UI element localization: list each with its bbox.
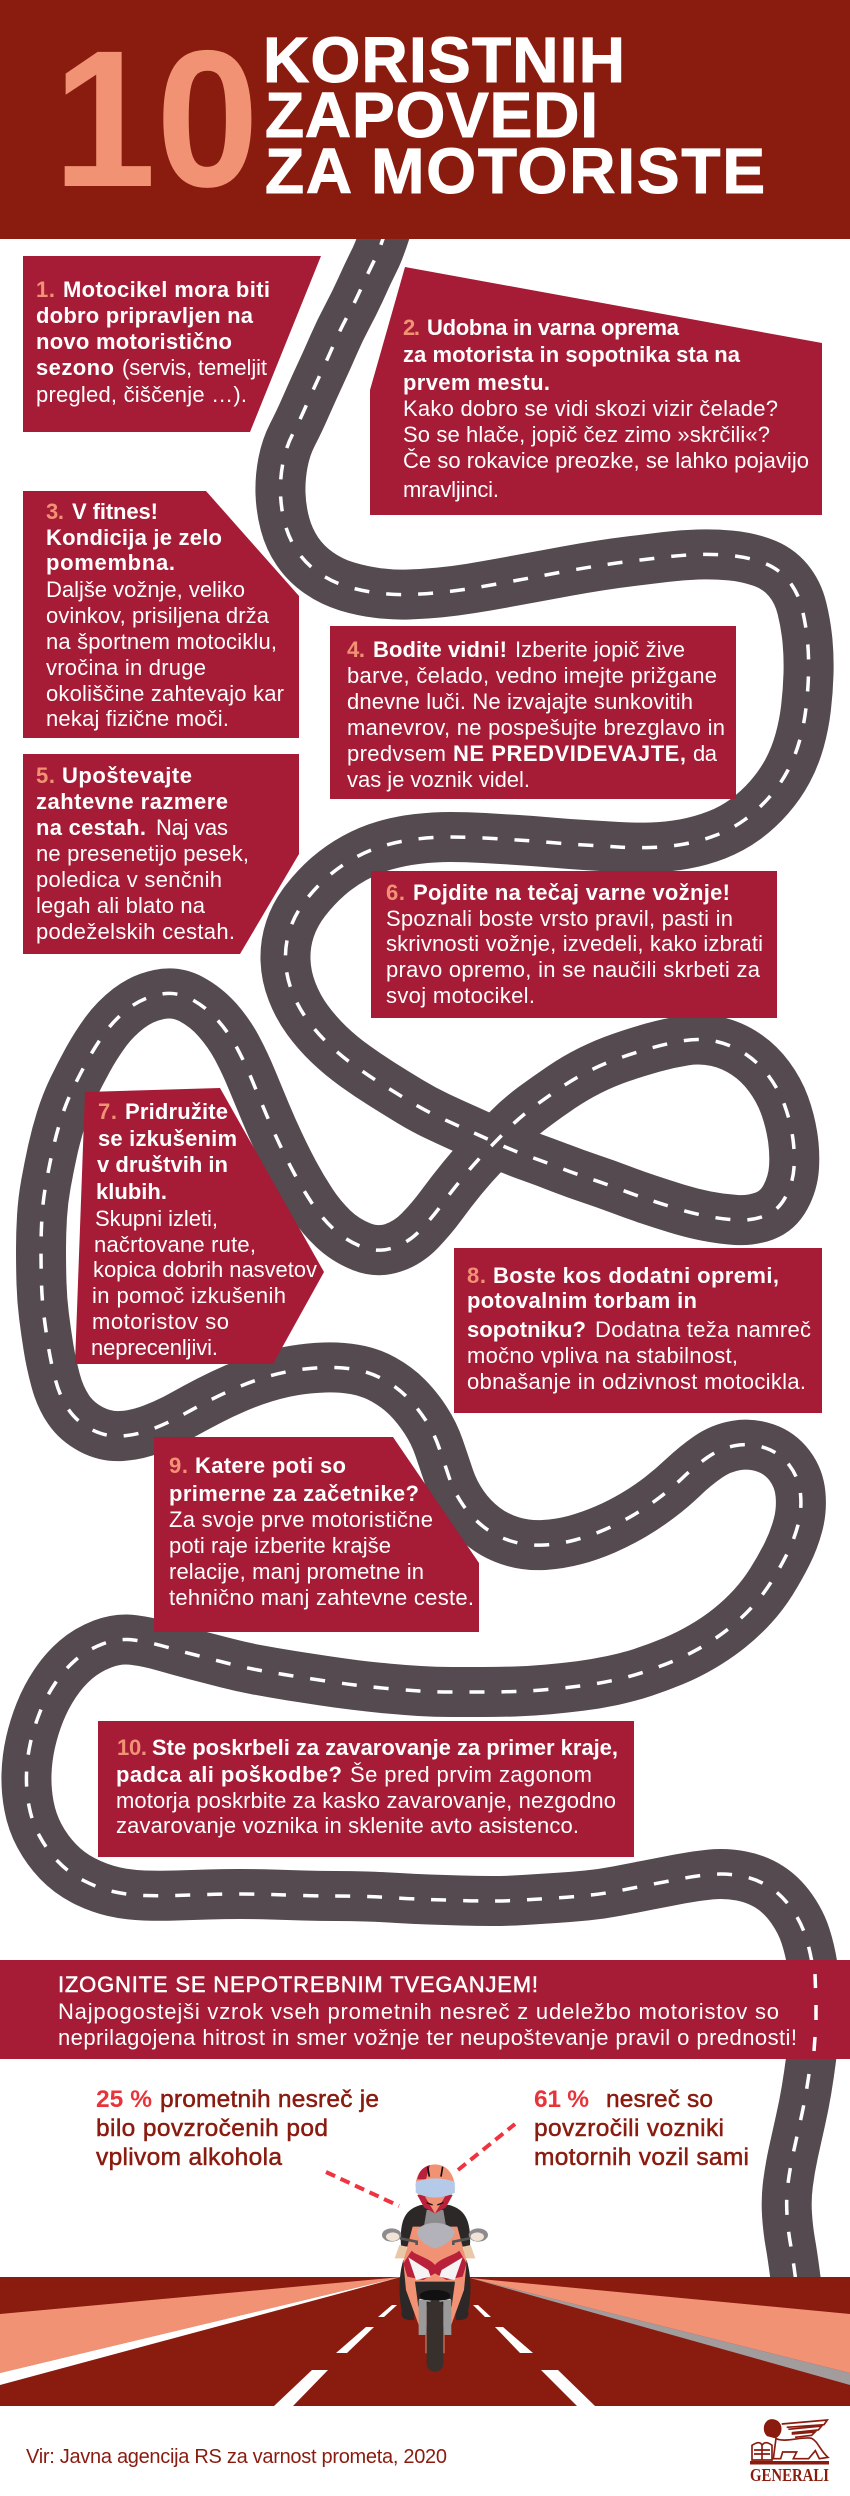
panel: tip 3: 3. xyxy=(46,499,64,524)
statistic: 61 percent xyxy=(534,2086,749,2171)
panel: tip 4 xyxy=(330,626,736,799)
statistic: 25 percent: vplivom alkohola xyxy=(96,2144,282,2171)
winding road xyxy=(26,200,816,2290)
statistic: 25 percent: prometnih nesreč je xyxy=(160,2086,379,2113)
rider legs and boots xyxy=(400,2260,470,2320)
panel: tip 10: Še pred prvim zagonom xyxy=(350,1762,592,1787)
panel: tip 4: 4. xyxy=(347,637,365,662)
panel: tip 5: poledica v senčnih xyxy=(36,867,222,892)
panel: tip 6: Spoznali boste vrsto pravil, pasti in xyxy=(386,906,733,931)
panel: warning banner xyxy=(0,1960,850,2059)
dashed callout lines xyxy=(326,2124,515,2206)
text block: warning body: Najpogostejši vzrok vseh prometnih nesreč z udeležbo motoristov so xyxy=(58,1999,779,2024)
panel: tip 7: 7. xyxy=(98,1099,117,1124)
rider collar xyxy=(423,2210,447,2230)
panel: tip 7: kopica dobrih nasvetov xyxy=(93,1257,317,1282)
headlights xyxy=(408,2257,463,2280)
panel: tip 9: primerne za začetnike? xyxy=(169,1481,419,1506)
panel: tip 7: neprecenljivi. xyxy=(91,1335,218,1360)
logo wordmark: GENERALI xyxy=(750,2465,829,2485)
panel: tip 3: V fitnes! xyxy=(72,499,158,524)
headlight beam right xyxy=(470,2278,850,2373)
panel: tip 1: Motocikel mora biti xyxy=(63,277,270,302)
source note: Vir: Javna agencija RS za varnost prometa, 2020 xyxy=(26,2446,447,2468)
panel: tip 3: Kondicija je zelo xyxy=(46,525,222,550)
panel: tip 8: močno vpliva na stabilnost, xyxy=(467,1343,738,1368)
panel: tip 6: 6. xyxy=(386,880,405,905)
panel: tip 10: padca ali poškodbe? xyxy=(116,1762,342,1787)
panel: tip 6 xyxy=(371,871,777,1018)
panel: tip 5: zahtevne razmere xyxy=(36,789,228,814)
panel: tip 7: klubih. xyxy=(96,1179,167,1204)
panel: tip 5: 5. xyxy=(36,763,55,788)
panel: tip 9: Katere poti so xyxy=(195,1453,346,1478)
panel: tip 4: da xyxy=(693,741,718,766)
panel: tip 2: Če so rokavice preozke, se lahko pojavijo xyxy=(403,448,809,473)
panel: tip 4: Izberite jopič žive xyxy=(515,637,685,662)
panel: tip 7: motoristov so xyxy=(92,1309,229,1334)
fairing red trim xyxy=(403,2251,467,2280)
panel: tip 1 xyxy=(23,256,321,432)
statistic: 25 percent: 25 % xyxy=(96,2086,152,2113)
headlight beam left xyxy=(0,2277,401,2373)
panel: tip 3: Daljše vožnje, veliko xyxy=(46,577,245,602)
panel: tip 10: zavarovanje voznika in sklenite avto asistenco. xyxy=(116,1813,579,1838)
statistic: 25 percent xyxy=(96,2086,379,2171)
panel: tip 6: skrivnosti vožnje, izvedeli, kako izbrati xyxy=(386,931,763,956)
road centre dashes over banner xyxy=(814,1974,816,2051)
panel: tip 3: na športnem motociklu, xyxy=(46,629,277,654)
panel: tip 3: vročina in druge xyxy=(46,655,206,680)
panel: tip 1: novo motoristično xyxy=(36,329,232,354)
statistic: 61 percent: nesreč so xyxy=(606,2086,713,2113)
rider jacket xyxy=(401,2205,470,2247)
icon: motorcyclist xyxy=(382,2164,488,2372)
panel: tip 2: za motorista in sopotnika sta na xyxy=(403,342,741,367)
panel: tip 8 xyxy=(454,1248,822,1413)
title xyxy=(263,24,765,207)
panel: tip 5: Naj vas xyxy=(156,815,228,840)
windshield xyxy=(417,2223,455,2249)
big number 10: 10 xyxy=(53,10,259,228)
panel: tip 7: Skupni izleti, xyxy=(95,1206,218,1231)
panel: tip 3: okoliščine zahtevajo kar xyxy=(46,681,284,706)
panel: tip 5: Upoštevajte xyxy=(62,763,192,788)
panel: tip 5: legah ali blato na xyxy=(36,893,206,918)
panel: tip 3 xyxy=(23,491,299,738)
panel: tip 7 xyxy=(75,1088,324,1364)
panel: tip 4: NE PREDVIDEVAJTE, xyxy=(453,741,686,766)
panel: tip 3: pomembna. xyxy=(46,550,175,575)
panel: tip 4: dnevne luči. Ne izvajajte sunkovitih xyxy=(347,689,693,714)
panel: tip 2: So se hlače, jopič čez zimo »skrčili«? xyxy=(403,422,770,447)
panel: tip 1: (servis, temeljit xyxy=(122,355,267,380)
panel: tip 7: v društvih in xyxy=(97,1152,228,1177)
panel: tip 9 xyxy=(154,1437,479,1632)
title: ZAPOVEDI xyxy=(265,79,598,151)
panel: tip 8: Dodatna teža namreč xyxy=(595,1317,811,1342)
panel: tip 7: se izkušenim xyxy=(98,1126,237,1151)
panel: tip 9: relacije, manj prometne in xyxy=(169,1559,424,1584)
panel: tip 9: tehnično manj zahtevne ceste. xyxy=(169,1585,474,1610)
panel: tip 3: ovinkov, prisiljena drža xyxy=(46,603,270,628)
logo lion emblem xyxy=(752,2420,828,2460)
panel: tip 2: Udobna in varna oprema xyxy=(427,315,680,340)
statistic: 61 percent: motornih vozil sami xyxy=(534,2144,749,2171)
panel: tip 4: vas je voznik videl. xyxy=(347,767,530,792)
panel: tip 2: Kako dobro se vidi skozi vizir čelade? xyxy=(403,396,778,421)
front wheel xyxy=(427,2300,443,2372)
panel: tip 10: motorja poskrbite za kasko zavarovanje, nezgodno xyxy=(116,1788,616,1813)
road scene xyxy=(0,2277,850,2406)
panel: tip 2: 2. xyxy=(403,315,420,340)
panel: tip 4: manevrov, ne pospešujte brezglavo in xyxy=(347,715,725,740)
road edge left xyxy=(0,2277,401,2385)
fairing xyxy=(403,2227,467,2327)
panel: tip 1: dobro pripravljen na xyxy=(36,303,254,328)
panel: tip 1: sezono xyxy=(36,355,114,380)
panel: tip 10 xyxy=(98,1721,634,1857)
header banner xyxy=(0,0,850,239)
panel: tip 8: obnašanje in odzivnost motocikla. xyxy=(467,1369,806,1394)
panel: tip 5: ne presenetijo pesek, xyxy=(36,841,249,866)
panel: tip 9: poti raje izberite krajše xyxy=(169,1533,391,1558)
panel: tip 4: Bodite vidni! xyxy=(373,637,507,662)
panel: tip 7: in pomoč izkušenih xyxy=(92,1283,286,1308)
helmet xyxy=(416,2164,455,2213)
heading: warning: IZOGNITE SE NEPOTREBNIM TVEGANJEM! xyxy=(58,1972,538,1997)
title: KORISTNIH xyxy=(263,24,625,96)
panel: tip 1: pregled, čiščenje …). xyxy=(36,382,247,407)
panel: tip 9: Za svoje prve motoristične xyxy=(169,1507,433,1532)
title: ZA MOTORISTE xyxy=(265,135,765,207)
panel: tip 2 xyxy=(370,267,822,515)
text block: warning body xyxy=(58,1999,797,2050)
logo: Generali xyxy=(750,2420,829,2485)
panel: tip 9: 9. xyxy=(169,1453,188,1478)
panel: tip 8: potovalnim torbam in xyxy=(467,1288,697,1313)
panel: tip 6: pravo opremo, in se naučili skrbeti za xyxy=(386,957,761,982)
statistic: 25 percent: bilo povzročenih pod xyxy=(96,2115,328,2142)
hands xyxy=(395,2245,475,2258)
panel: tip 4: barve, čelado, vedno imejte prižgane xyxy=(347,663,717,688)
logo bar xyxy=(750,2461,829,2464)
panel: tip 2: prvem mestu. xyxy=(403,370,550,395)
panel: tip 7: Pridružite xyxy=(125,1099,228,1124)
text block: warning body: neprilagojena hitrost in smer vožnje ter neupoštevanje pravil o prednosti! xyxy=(58,2025,797,2050)
panel: tip 3: nekaj fizične moči. xyxy=(46,706,229,731)
panel: tip 8: sopotniku? xyxy=(467,1317,586,1342)
panel: tip 8: 8. xyxy=(467,1263,486,1288)
panel: tip 2: mravljinci. xyxy=(403,477,499,502)
statistic: 61 percent: 61 % xyxy=(534,2086,589,2113)
statistic: 61 percent: povzročili vozniki xyxy=(534,2115,724,2142)
panel: tip 7: načrtovane rute, xyxy=(94,1232,256,1257)
panel: tip 10: Ste poskrbeli za zavarovanje za primer kraje, xyxy=(152,1735,618,1760)
mirrors xyxy=(382,2228,488,2245)
front forks and fender xyxy=(415,2282,455,2353)
panel: tip 5: podeželskih cestah. xyxy=(36,919,235,944)
panel: tip 5: na cestah. xyxy=(36,815,146,840)
panel: tip 10: 10. xyxy=(117,1735,147,1760)
panel: tip 8: Boste kos dodatni opremi, xyxy=(493,1263,779,1288)
panel: tip 6: svoj motocikel. xyxy=(386,983,535,1008)
lane markings xyxy=(274,2305,595,2406)
panel: tip 4: predvsem xyxy=(347,741,446,766)
panel: tip 1: 1. xyxy=(36,277,55,302)
panel: tip 6: Pojdite na tečaj varne vožnje! xyxy=(413,880,730,905)
road edge right xyxy=(470,2278,850,2385)
panel: tip 5 xyxy=(23,754,299,954)
